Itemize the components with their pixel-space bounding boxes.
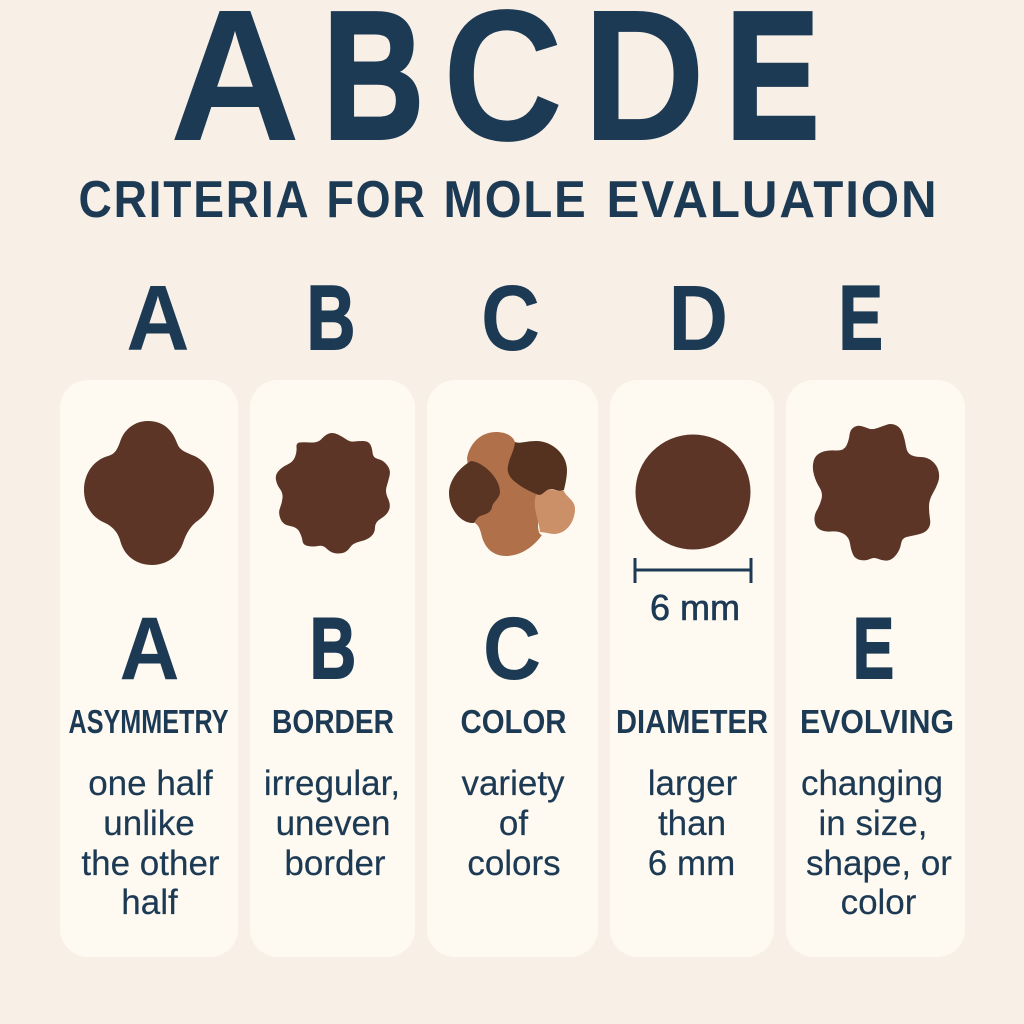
title: [170, 0, 819, 181]
description: evolving: [801, 764, 952, 922]
panel: diameter: [610, 380, 774, 957]
description: asymmetry: unlike: [103, 804, 195, 843]
description: diameter: 6 mm: [648, 844, 735, 883]
panel: color: [427, 380, 598, 957]
subtitle: FOR: [326, 171, 426, 229]
label: color: COLOR: [460, 703, 567, 740]
scale label: 6 mm: [650, 587, 740, 628]
description: evolving: shape, or: [806, 844, 952, 883]
subtitle: EVALUATION: [606, 171, 938, 229]
icon: irregular border mole: [276, 433, 390, 554]
letter C: C: [483, 598, 541, 698]
description: diameter: [648, 764, 738, 883]
description: diameter: larger: [648, 764, 738, 803]
panel: asymmetry: [60, 380, 238, 957]
description: border: uneven: [276, 804, 390, 843]
panel: border: [250, 380, 415, 957]
description: asymmetry: half: [121, 883, 178, 922]
description: color: colors: [467, 844, 561, 883]
label: border: BORDER: [272, 703, 394, 740]
icon: round mole: [636, 434, 750, 550]
subtitle: [78, 171, 938, 229]
description: border: [264, 764, 400, 883]
subtitle: CRITERIA: [78, 171, 310, 229]
description: diameter: than: [658, 804, 726, 843]
label: evolving: EVOLVING: [800, 703, 954, 740]
scale bar: [635, 558, 751, 583]
subtitle: MOLE: [444, 171, 588, 229]
icon: multicolor mole: [449, 432, 575, 556]
icon: evolving mole: [813, 424, 939, 561]
description: asymmetry: [81, 764, 220, 922]
top letter row: D: [668, 265, 728, 370]
description: border: border: [284, 844, 386, 883]
letter A: A: [119, 600, 180, 699]
top letter row: B: [307, 267, 355, 368]
label: asymmetry: ASYMMETRY: [68, 703, 228, 740]
description: color: [461, 764, 565, 883]
letter E: E: [853, 600, 894, 696]
top letter row: A: [126, 267, 190, 371]
description: color: of: [499, 804, 528, 843]
label: diameter: DIAMETER: [616, 703, 768, 740]
icon: asymmetric mole: [84, 421, 214, 565]
letter B: B: [310, 601, 356, 697]
description: asymmetry: one half: [88, 764, 213, 803]
panel: evolving: [786, 380, 965, 957]
top letter row: E: [839, 267, 883, 368]
description: evolving: in size,: [819, 804, 927, 843]
description: evolving: color: [841, 883, 917, 922]
description: evolving: changing: [801, 764, 943, 803]
top letter row: C: [481, 266, 540, 370]
description: color: variety: [461, 764, 565, 803]
description: border: irregular,: [264, 764, 400, 803]
description: asymmetry: the other: [81, 844, 220, 883]
top letter row: [126, 265, 883, 371]
